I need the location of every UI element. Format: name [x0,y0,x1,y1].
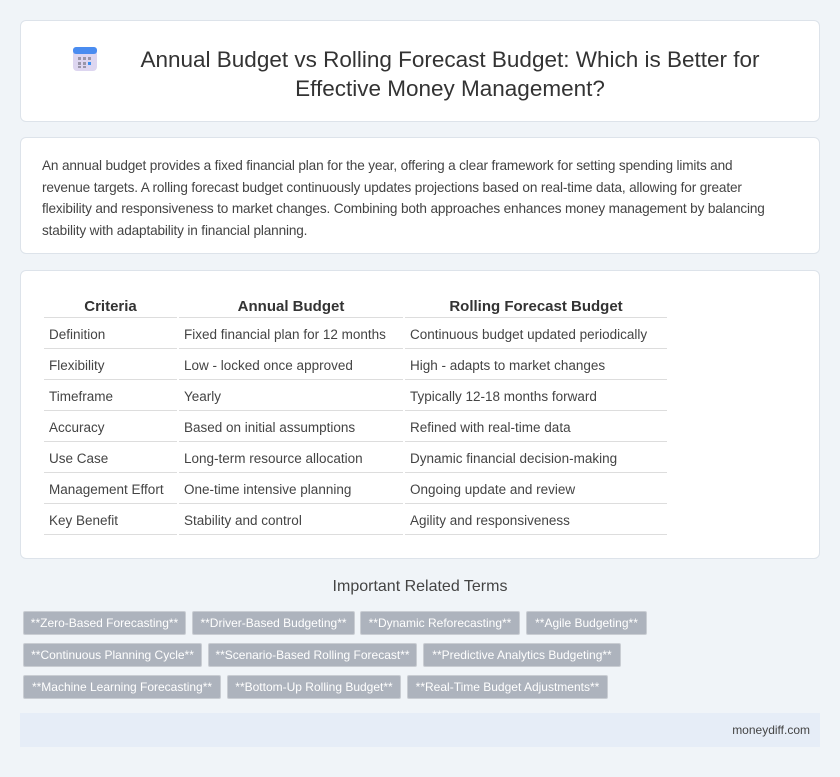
tags: **Machine Learning Forecasting** [32,680,212,694]
comparison table: Key Benefit [49,512,118,528]
comparison table: Dynamic financial decision-making [410,450,617,466]
tags: **Zero-Based Forecasting** [31,616,178,630]
tags: **Continuous Planning Cycle** [31,648,194,662]
comparison table: Refined with real-time data [410,420,571,434]
comparison table: Definition [49,326,105,342]
comparison table: Rolling Forecast Budget [449,298,623,314]
comparison table: Stability and control [184,512,302,528]
tags: **Real-Time Budget Adjustments** [416,680,599,694]
comparison table: Ongoing update and review [410,482,575,496]
comparison table: Management Effort [49,482,164,496]
comparison table: Flexibility [49,358,105,372]
comparison table: Typically 12-18 months forward [410,388,597,404]
comparison table: Accuracy [49,420,105,434]
tags: **Driver-Based Budgeting** [200,616,347,630]
comparison table: Based on initial assumptions [184,420,355,434]
related terms heading: Important Related Terms [333,578,507,595]
comparison table: Continuous budget updated periodically [410,326,647,342]
comparison table: Criteria [84,298,137,314]
tags: **Bottom-Up Rolling Budget** [235,680,393,694]
comparison table: One-time intensive planning [184,482,351,496]
header card [20,20,820,122]
comparison table: Use Case [49,450,108,466]
comparison table: Timeframe [49,388,113,404]
intro text: An annual budget provides a fixed financial plan for the year, offering a clear framework for setting spending limits and revenue targets. A rolling forecast budget continuously updates projections based on real-time data, allowing for greater flexibility and responsiveness to market changes. Combining both approaches enhances money management by balancing stability with adaptability in financial planning. [42,158,765,238]
comparison table: Annual Budget [238,298,344,314]
tags: **Dynamic Reforecasting** [369,616,511,630]
comparison table: Low - locked once approved [184,358,353,372]
comparison table: Agility and responsiveness [410,512,570,528]
footer [20,713,820,747]
icon: calendar [73,47,97,71]
tags: **Agile Budgeting** [535,616,638,630]
footer: moneydiff.com [732,723,810,737]
tags: **Predictive Analytics Budgeting** [432,648,612,662]
comparison table: Long-term resource allocation [184,450,363,466]
comparison table: Fixed financial plan for 12 months [184,326,386,342]
title: Annual Budget vs Rolling Forecast Budget: Which is Better for Effective Money Management? [140,47,760,101]
comparison table: High - adapts to market changes [410,358,605,372]
comparison table [20,270,820,559]
intro text [20,137,820,254]
comparison table: Yearly [184,388,221,404]
tags: **Scenario-Based Rolling Forecast** [215,648,410,662]
